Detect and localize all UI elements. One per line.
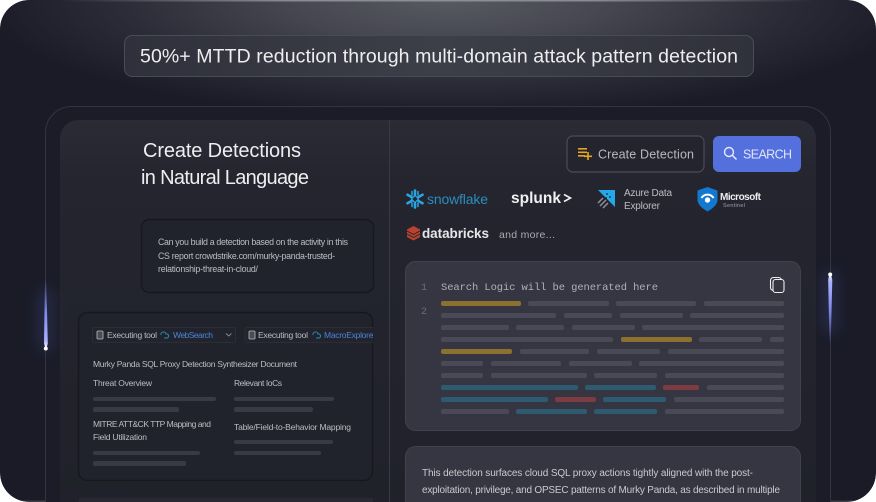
heading: create detections	[141, 140, 309, 189]
prompt card	[142, 220, 374, 292]
tool chip: MacroExplorer: MacroExplorer	[324, 330, 376, 340]
section: mitre mapping	[93, 419, 211, 466]
app frame	[46, 106, 830, 502]
next card edge	[79, 498, 373, 502]
section: table mapping	[234, 422, 351, 455]
tool chip: WebSearch	[92, 328, 236, 342]
line numbers: 2	[421, 307, 427, 318]
panel: detection summary: exploitation, privilege, and OPSEC patterns of Murky Panda, as described in multiple	[422, 485, 780, 496]
section: relevant iocs: Relevant IoCs	[234, 378, 282, 388]
prompt card: relationship-threat-in-cloud/	[158, 264, 259, 274]
section: threat overview	[93, 378, 216, 412]
prompt card: CS report crowdstrike.com/murky-panda-trusted-	[158, 251, 335, 261]
button: search	[713, 136, 801, 172]
section: mitre mapping: Field Utilization	[93, 432, 147, 442]
title pill	[124, 36, 754, 76]
section: table mapping: Table/Field-to-Behavior Mapping	[234, 422, 351, 432]
title pill: 50%+ MTTD reduction through multi-domain attack pattern detection	[140, 46, 738, 68]
document title: Murky Panda SQL Proxy Detection Synthesizer Document	[93, 359, 298, 369]
code skeleton lines	[441, 301, 784, 414]
panel: detection summary: This detection surfaces cloud SQL proxy actions tightly aligned with the post-	[422, 468, 753, 479]
panel: tool execution card	[78, 312, 405, 480]
section: mitre mapping: MITRE ATT&CK TTP Mapping and	[93, 419, 211, 429]
section: threat overview: Threat Overview	[93, 378, 153, 388]
prompt card: Can you build a detection based on the activity in this	[158, 237, 349, 247]
logo: splunk: splunk	[511, 190, 561, 207]
logo: azure data explorer: Azure Data	[624, 188, 672, 199]
tool chip: MacroExplorer: Executing tool	[258, 330, 308, 340]
and more label: and more...	[499, 229, 555, 241]
logo: snowflake: snowflake	[427, 191, 488, 207]
logo: azure data explorer	[598, 188, 672, 212]
logo: microsoft sentinel: Microsoft	[720, 192, 762, 203]
panel: code output	[406, 262, 800, 430]
tool chip: WebSearch: Executing tool	[107, 330, 157, 340]
logo: azure data explorer: Explorer	[624, 201, 661, 212]
section: relevant iocs	[234, 378, 334, 412]
left glow accent	[38, 278, 53, 350]
code placeholder text: Search Logic will be generated here	[441, 282, 658, 294]
heading: create detections: in Natural Language	[141, 167, 309, 189]
button: create detection	[567, 136, 704, 172]
heading: create detections: Create Detections	[143, 140, 301, 162]
button: search: SEARCH	[743, 148, 792, 162]
logo: databricks: databricks	[422, 226, 489, 241]
right glow accent	[823, 272, 838, 345]
line numbers: 1	[421, 283, 427, 294]
button: create detection: Create Detection	[598, 148, 694, 162]
tool chip: MacroExplorer	[244, 327, 373, 343]
panel: detection summary	[406, 446, 800, 502]
logo: microsoft sentinel	[698, 187, 762, 212]
icon: copy	[770, 278, 784, 292]
tool chip: WebSearch: WebSearch	[173, 330, 213, 340]
logo: microsoft sentinel: Sentinel	[723, 203, 745, 209]
line numbers	[421, 283, 427, 318]
